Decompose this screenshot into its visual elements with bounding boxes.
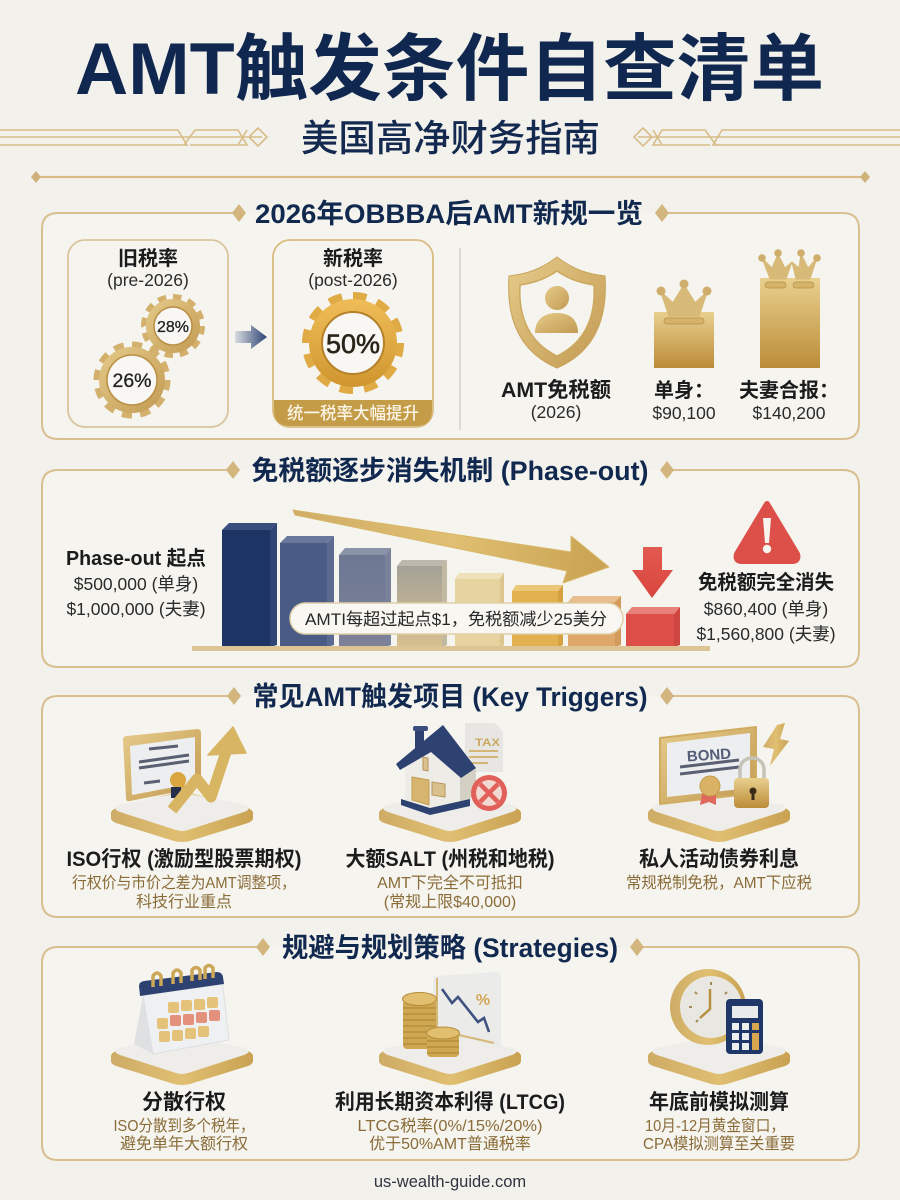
text: ISO: 科技行业重点 bbox=[136, 893, 232, 911]
label: AMT exemption bbox=[501, 379, 611, 422]
item: SALT bbox=[346, 723, 554, 911]
vertical divider bbox=[459, 248, 461, 430]
label: joint amount: $140,200 bbox=[752, 403, 826, 423]
text: year-end simulation: CPA模拟测算至关重要 bbox=[643, 1134, 795, 1153]
arrow: gold downward trend bbox=[293, 510, 609, 583]
text: LTCG: 利用长期资本利得 (LTCG) bbox=[335, 1091, 565, 1114]
bar 4 bbox=[397, 560, 447, 647]
text: SALT: AMT下完全不可抵扣 bbox=[377, 874, 523, 892]
panel: phase-out bbox=[42, 456, 859, 667]
top divider bbox=[31, 171, 870, 183]
bar: joint filers with two crowns bbox=[758, 249, 821, 368]
card: old tax rate: 旧税率 bbox=[118, 247, 178, 270]
card: new tax rate: (post-2026) bbox=[308, 270, 398, 290]
heading: strategies: 规避与规划策略 (Strategies) bbox=[282, 933, 618, 963]
text: SALT bbox=[346, 848, 554, 911]
text: exemption fully eliminated: $1,560,800 (夫妻) bbox=[696, 624, 836, 644]
bar 2 bbox=[280, 536, 334, 647]
icon: certificate and rising arrow bbox=[111, 727, 253, 842]
card: new tax rate bbox=[273, 240, 433, 427]
label: joint amount: 夫妻合报： bbox=[739, 379, 839, 402]
text: spread exercise: 避免单年大额行权 bbox=[120, 1135, 248, 1153]
gear: 28% bbox=[145, 298, 201, 354]
text: phase-out start: Phase-out 起点 bbox=[66, 547, 206, 570]
item: year-end simulation bbox=[643, 969, 795, 1153]
panel: key triggers bbox=[42, 682, 859, 917]
card: new tax rate: 新税率 bbox=[323, 247, 383, 270]
bar 6 bbox=[512, 585, 563, 647]
text: year-end simulation: 10月-12月黄金窗口， bbox=[645, 1117, 785, 1135]
label: single amount: 单身： bbox=[654, 379, 714, 402]
heading: key triggers: 常见AMT触发项目 (Key Triggers) bbox=[252, 682, 648, 712]
heading: phase-out: 免税额逐步消失机制 (Phase-out) bbox=[252, 456, 648, 486]
item: ISO bbox=[66, 727, 302, 911]
text: private activity bonds: 私人活动债券利息 bbox=[639, 847, 799, 871]
bar 3 bbox=[339, 548, 391, 647]
bar 8 bbox=[626, 607, 680, 647]
text: exemption fully eliminated: $860,400 (单身) bbox=[704, 599, 828, 619]
heading: 2026 rules: 2026年OBBBA后AMT新规一览 bbox=[255, 199, 643, 229]
text: spread exercise: 分散行权 bbox=[142, 1091, 226, 1114]
icon: house and tax form: TAX bbox=[475, 737, 501, 749]
icon: clock and calculator bbox=[648, 969, 790, 1085]
icon: bond certificate and lock: BOND bbox=[686, 745, 732, 766]
text: ISO: ISO行权 (激励型股票期权) bbox=[66, 848, 302, 871]
text: LTCG bbox=[335, 1091, 565, 1153]
arrow: old to new bbox=[235, 325, 267, 349]
bar chart: declining exemption bbox=[192, 523, 710, 651]
icon: warning triangle bbox=[737, 504, 797, 561]
text: spread exercise: ISO分散到多个税年， bbox=[114, 1117, 254, 1135]
text: phase-out start: $1,000,000 (夫妻) bbox=[66, 599, 206, 619]
callout: 25 cents rule bbox=[290, 603, 623, 634]
gear: 26%: 26% bbox=[112, 370, 152, 392]
label: joint amount bbox=[739, 379, 839, 423]
callout: 25 cents rule: AMTI每超过起点$1，免税额减少25美分 bbox=[305, 610, 607, 629]
text: LTCG: 优于50%AMT普通税率 bbox=[369, 1135, 531, 1153]
icon: bond certificate and lock bbox=[648, 723, 790, 842]
baseline bbox=[192, 646, 710, 651]
item: spread exercise bbox=[111, 966, 254, 1153]
text: ISO: 行权价与市价之差为AMT调整项， bbox=[72, 874, 296, 892]
banner: unified rate bbox=[274, 400, 432, 426]
bar 1 bbox=[222, 523, 277, 647]
card: old tax rate: (pre-2026) bbox=[107, 270, 189, 290]
header ornament left bbox=[0, 128, 267, 146]
gear: 26% bbox=[98, 346, 166, 414]
label: AMT exemption: AMT免税额 bbox=[501, 379, 611, 402]
banner: unified rate: 统一税率大幅提升 bbox=[287, 403, 419, 423]
text: SALT: (常规上限$40,000) bbox=[384, 893, 516, 911]
icon: house and tax form bbox=[379, 723, 521, 842]
label: AMT exemption: (2026) bbox=[531, 402, 581, 422]
text: year-end simulation: 年底前模拟测算 bbox=[649, 1090, 789, 1114]
text: year-end simulation bbox=[643, 1090, 795, 1153]
text: LTCG: LTCG税率(0%/15%/20%) bbox=[358, 1117, 542, 1135]
header ornament right bbox=[634, 128, 900, 146]
text: private activity bonds bbox=[626, 847, 812, 892]
text: SALT: 大额SALT (州税和地税) bbox=[346, 848, 554, 871]
title: AMT触发条件自查清单 bbox=[75, 29, 824, 110]
label: single amount: $90,100 bbox=[652, 403, 716, 423]
gear: 50% bbox=[308, 298, 398, 388]
gear: 28%: 28% bbox=[157, 319, 189, 336]
text: phase-out start bbox=[66, 547, 206, 619]
item: private activity bonds bbox=[626, 723, 812, 892]
panel: strategies bbox=[42, 933, 859, 1160]
text: exemption fully eliminated: 免税额完全消失 bbox=[698, 570, 834, 594]
bar 5 bbox=[455, 573, 504, 647]
text: private activity bonds: 常规税制免税，AMT下应税 bbox=[626, 873, 812, 892]
label: single amount bbox=[652, 379, 716, 423]
panel: 2026 new rules bbox=[42, 199, 859, 439]
gear: 50%: 50% bbox=[326, 329, 380, 359]
card: old tax rate bbox=[68, 240, 228, 427]
item: LTCG bbox=[335, 972, 565, 1153]
text: phase-out start: $500,000 (单身) bbox=[74, 574, 198, 594]
footer: us-wealth-guide.com bbox=[374, 1173, 526, 1191]
bar 7 bbox=[568, 596, 621, 647]
icon: shield bbox=[509, 257, 605, 368]
text: ISO bbox=[66, 848, 302, 911]
icon: calendar bbox=[111, 966, 253, 1085]
text: exemption fully eliminated bbox=[696, 570, 836, 644]
icon: coins and chart: % bbox=[476, 992, 490, 1009]
text: spread exercise bbox=[114, 1091, 254, 1153]
bar: single filer with crown bbox=[654, 280, 714, 368]
icon: coins and chart bbox=[379, 972, 521, 1085]
arrow: red down bbox=[632, 547, 673, 598]
subtitle: 美国高净财务指南 bbox=[301, 118, 600, 159]
